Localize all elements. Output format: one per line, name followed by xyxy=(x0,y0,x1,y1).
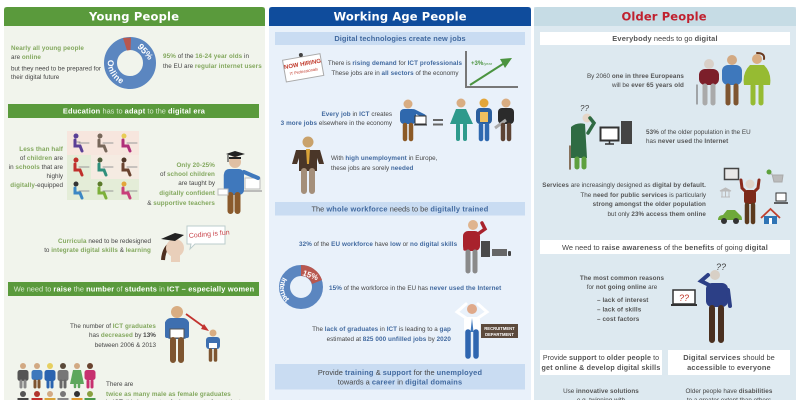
text: only 20-25 percent: of school children xyxy=(160,171,215,178)
text: common reasons: – cost factors xyxy=(597,316,640,323)
icon: builder xyxy=(476,98,492,139)
box: accessible services: accessible to everyone xyxy=(687,363,771,372)
banner: whole workforce xyxy=(275,202,525,216)
text: one in three: By 2060 one in three Europeans xyxy=(587,73,684,80)
icon: older man surrounded by services xyxy=(741,180,759,222)
text: less than half: Less than half xyxy=(19,146,64,153)
banner: education xyxy=(8,104,259,118)
young heading: Young People xyxy=(88,10,179,24)
text: lack of graduates: estimated at 825 000 unfilled jobs by 2020 xyxy=(327,336,451,343)
banner: provide training: Provide training & support for the unemployed xyxy=(318,368,482,377)
text: less than half: in schools that are xyxy=(9,164,63,171)
text: twice as many male: twice as many male as female graduates xyxy=(106,391,231,398)
text: ICT graduates decreased: The number of ICT graduates xyxy=(70,323,156,330)
text: nearly all online: their digital future xyxy=(11,74,60,81)
box: accessible services xyxy=(668,350,790,375)
icon: tablet xyxy=(724,168,738,180)
text: curricula xyxy=(44,238,151,254)
text: one in three xyxy=(587,73,684,89)
icon: green car xyxy=(718,210,742,224)
text: innovative solutions: Use innovative solutions xyxy=(563,388,639,395)
text: digital by default: strong amongst the older population xyxy=(593,201,706,208)
text: one in three: will be ever 65 years old xyxy=(611,82,684,89)
panel: working age people xyxy=(269,7,531,400)
icon: desktop computer xyxy=(600,121,632,144)
icon: equals sign xyxy=(433,119,443,126)
icon: teacher with laptop xyxy=(218,151,262,211)
box: accessible services: Digital services should be xyxy=(683,353,775,362)
banner: education: Education has to adapt to the digital era xyxy=(63,106,206,116)
text: 53 percent xyxy=(646,129,751,145)
text: common reasons: – lack of interest xyxy=(597,297,649,304)
banner: raise number of students xyxy=(8,282,259,296)
icon: confused worker at computer xyxy=(463,220,511,271)
icon: confused man with empty pockets xyxy=(701,262,730,340)
icon: house xyxy=(761,209,780,224)
icon: student head with speech bubble xyxy=(161,226,230,262)
text: 95 percent of 16-24 xyxy=(163,53,262,70)
text: every job: 3 more jobs elsewhere in the economy xyxy=(281,120,393,127)
icon: nurse xyxy=(450,98,473,139)
banner: whole workforce: The whole workforce needs to be digitally trained xyxy=(312,204,489,214)
panel: young people xyxy=(4,7,265,400)
icon: shopping cart xyxy=(766,170,783,182)
text: nearly all online xyxy=(11,45,101,81)
text: disabilities xyxy=(686,388,773,400)
chart: plus 3 percent per year xyxy=(466,51,518,87)
banner: raise awareness xyxy=(540,240,790,254)
text: less than half: of children are xyxy=(20,155,63,162)
text: digital by default: Services are increasingly designed as digital by default. xyxy=(542,182,706,189)
chart: 15 percent internet donut xyxy=(279,265,323,309)
working heading xyxy=(269,7,531,26)
text: high unemployment xyxy=(331,155,438,172)
sign: recruitment department xyxy=(481,324,518,338)
icon: confused man with empty pockets: ?? xyxy=(716,262,726,272)
text: 95 percent of 16-24: 95% of the 16-24 year olds in xyxy=(163,53,249,60)
illustration: classroom grid xyxy=(67,131,139,200)
chart: 15 percent internet donut: Internet xyxy=(280,277,289,302)
banner: provide training: towards a career in digital domains xyxy=(338,378,462,386)
text: high unemployment: these jobs are sorely needed xyxy=(331,165,414,172)
text: curricula: Curricula need to be redesigned xyxy=(58,238,151,245)
speech bubble: Coding is fun xyxy=(189,229,230,240)
older heading xyxy=(534,7,796,26)
icon: mechanic xyxy=(495,98,514,139)
text: only 20-25 percent: are taught by xyxy=(178,180,216,187)
older heading: Older People xyxy=(622,10,707,24)
icon: recruiter xyxy=(457,304,487,356)
icon: unemployed man xyxy=(292,136,324,191)
text: less than half: highly xyxy=(47,173,64,180)
chart: 95 percent online donut: 95% xyxy=(136,42,155,62)
text: nearly all online: but they need to be prepared for xyxy=(11,66,101,72)
icon: laptop with question marks: ?? xyxy=(679,293,689,303)
text: less than half xyxy=(9,146,64,189)
icon: now hiring note xyxy=(282,50,324,82)
sign: recruitment department: RECRUITMENT xyxy=(484,326,515,331)
box: provide support: Provide support to older people to xyxy=(543,354,659,362)
panel: older people xyxy=(534,7,796,400)
text: every job xyxy=(281,111,393,127)
text: innovative solutions xyxy=(563,388,639,400)
text: every job: Every job in ICT creates xyxy=(321,111,392,118)
text: rising demand: These jobs are in all sectors of the economy xyxy=(331,70,459,77)
banner: raise awareness: We need to raise awareness of the benefits of going digital xyxy=(562,243,768,252)
text: nearly all online: are online xyxy=(11,54,41,61)
illustration: crowd of graduates xyxy=(18,363,96,400)
icon: large graduate xyxy=(165,306,189,360)
text: lack of graduates xyxy=(312,326,451,343)
banner: digital technologies xyxy=(275,32,525,45)
arrow: decline xyxy=(186,314,209,331)
text: common reasons: for not going online are xyxy=(587,284,658,291)
text: digital by default xyxy=(542,182,707,218)
text: twice as many male: There are xyxy=(106,381,134,388)
text: 53 percent: has never used the Internet xyxy=(646,138,729,145)
banner: raise number of students: We need to raise the number of students in ICT – especially women xyxy=(14,284,255,294)
chart: 15 percent internet donut: 15% xyxy=(301,268,319,282)
icon: small graduate xyxy=(206,330,220,360)
text: less than half: digitally-equipped xyxy=(10,182,63,189)
text: ICT graduates decreased: between 2006 & 2013 xyxy=(95,342,156,349)
icon: bank xyxy=(720,188,731,197)
text: common reasons: The most common reasons xyxy=(580,275,664,282)
icon: ICT worker with laptop xyxy=(400,100,427,139)
icon: old man with cane xyxy=(570,104,594,169)
text: only 20-25 percent: digitally confident xyxy=(159,190,216,197)
text: 95 percent of 16-24: the EU are regular internet users xyxy=(163,63,262,70)
text: common reasons xyxy=(580,275,664,323)
text: ICT graduates decreased: has decreased by 13% xyxy=(89,332,156,339)
text: digital by default: The need for public services is particularly xyxy=(580,192,707,199)
icon: now hiring note: NOW HIRING xyxy=(284,59,322,71)
box: provide support xyxy=(540,350,662,375)
working heading: Working Age People xyxy=(334,10,467,24)
text: disabilities: Older people have disabilities xyxy=(686,388,773,395)
text: high unemployment: With high unemployment in Europe, xyxy=(331,155,438,162)
banner: provide training xyxy=(275,364,525,390)
text: rising demand: There is rising demand for ICT professionals xyxy=(328,60,463,67)
chart: 95 percent online donut xyxy=(104,37,156,89)
text: common reasons: – lack of skills xyxy=(597,306,642,314)
chart: plus 3 percent per year: +3%/year xyxy=(471,61,493,67)
sign: recruitment department: DEPARTMENT xyxy=(485,332,514,337)
banner: everybody digital: Everybody needs to go digital xyxy=(612,34,718,43)
text: digital by default: but only 23% access them online xyxy=(608,211,706,218)
banner: digital technologies: Digital technologies create new jobs xyxy=(334,34,466,43)
text: only 20-25 percent xyxy=(147,162,216,207)
text: twice as many male xyxy=(106,381,241,400)
text: only 20-25 percent: & supportive teachers xyxy=(147,200,215,207)
icon: laptop xyxy=(774,193,788,203)
box: provide support: get online & develop digital skills xyxy=(542,364,660,372)
icon: three generations xyxy=(697,53,770,104)
text: curricula: to integrate digital skills & learning xyxy=(44,247,151,254)
icon: old man with cane: ?? xyxy=(580,104,589,113)
text: nearly all online: Nearly all young people xyxy=(11,45,84,52)
text: only 20-25 percent: Only 20-25% xyxy=(176,162,215,169)
text: 32 percent: 32% of the EU workforce have low or no digital skills xyxy=(299,241,458,248)
text: 53 percent: 53% of the older population in the EU xyxy=(646,129,751,136)
chart: 95 percent online donut: Online xyxy=(108,60,123,84)
young heading xyxy=(4,7,265,26)
text: 15 percent never used: 15% of the workforce in the EU has never used the Internet xyxy=(329,285,502,292)
text: rising demand xyxy=(328,60,463,77)
text: ICT graduates decreased xyxy=(70,323,156,349)
text: lack of graduates: The lack of graduates in ICT is leading to a gap xyxy=(312,326,451,333)
banner: everybody digital xyxy=(540,32,790,45)
icon: laptop with question marks xyxy=(671,290,697,305)
icon: now hiring note: IT Professionals xyxy=(289,66,318,76)
